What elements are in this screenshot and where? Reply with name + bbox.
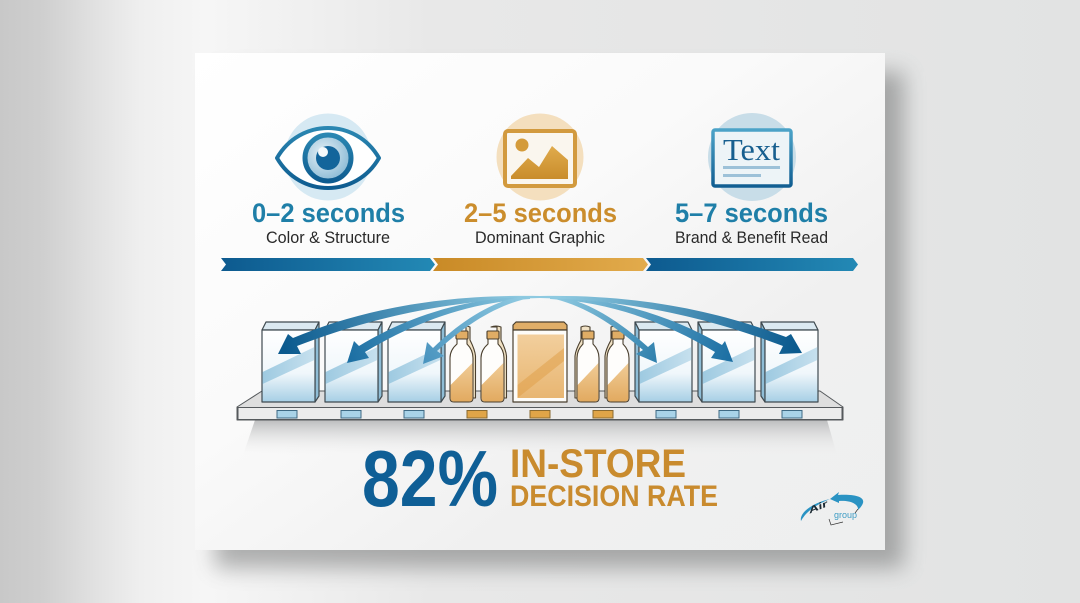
panel: white card bbox=[195, 53, 885, 550]
shelf bbox=[237, 391, 843, 420]
statistic label: IN-STORE: IN-STORE bbox=[510, 442, 686, 486]
shelf price tags bbox=[277, 410, 802, 418]
arrow: to far-right box bbox=[540, 296, 802, 354]
heading: 0–2 seconds: 0–2 seconds bbox=[252, 198, 405, 228]
heading: 2–5 seconds: 2–5 seconds bbox=[464, 198, 617, 228]
card drop shadow bbox=[215, 72, 904, 568]
left product boxes bbox=[262, 322, 445, 402]
logo: Air group: group bbox=[834, 510, 857, 520]
arrow: to third-right box bbox=[555, 297, 657, 363]
logo: Air group bbox=[801, 492, 863, 525]
bottles left bbox=[450, 326, 506, 402]
arrow: to third-left box bbox=[423, 297, 525, 364]
attention arrows bbox=[278, 296, 802, 364]
stage: 2–5 seconds bbox=[464, 114, 617, 247]
center featured product bbox=[513, 322, 567, 402]
shelf shadow bbox=[243, 420, 837, 455]
icon: eye bbox=[277, 114, 379, 200]
right product boxes bbox=[635, 322, 818, 402]
label: Brand &amp; Benefit Read: Brand & Benefit Read bbox=[675, 229, 828, 247]
stage: 5–7 seconds bbox=[675, 113, 828, 247]
label: Dominant Graphic: Dominant Graphic bbox=[475, 229, 605, 247]
stage: 0–2 seconds bbox=[252, 114, 405, 247]
timeline arrow bar bbox=[221, 258, 858, 271]
label: Color &amp; Structure: Color & Structure bbox=[266, 229, 390, 247]
bottles right bbox=[575, 326, 629, 402]
statistic label: DECISION RATE: DECISION RATE bbox=[510, 480, 718, 513]
statistic: 82%: 82% bbox=[362, 434, 498, 523]
icon: image bbox=[496, 114, 584, 200]
arrow: to far-left box bbox=[278, 296, 540, 354]
icon: text card bbox=[708, 113, 796, 201]
icon: text card: Text bbox=[723, 132, 780, 167]
logo: Air group: Air bbox=[805, 498, 830, 516]
arrow: to second-right box bbox=[550, 297, 733, 362]
heading: 5–7 seconds: 5–7 seconds bbox=[675, 198, 828, 228]
arrow: to second-left box bbox=[347, 297, 530, 363]
